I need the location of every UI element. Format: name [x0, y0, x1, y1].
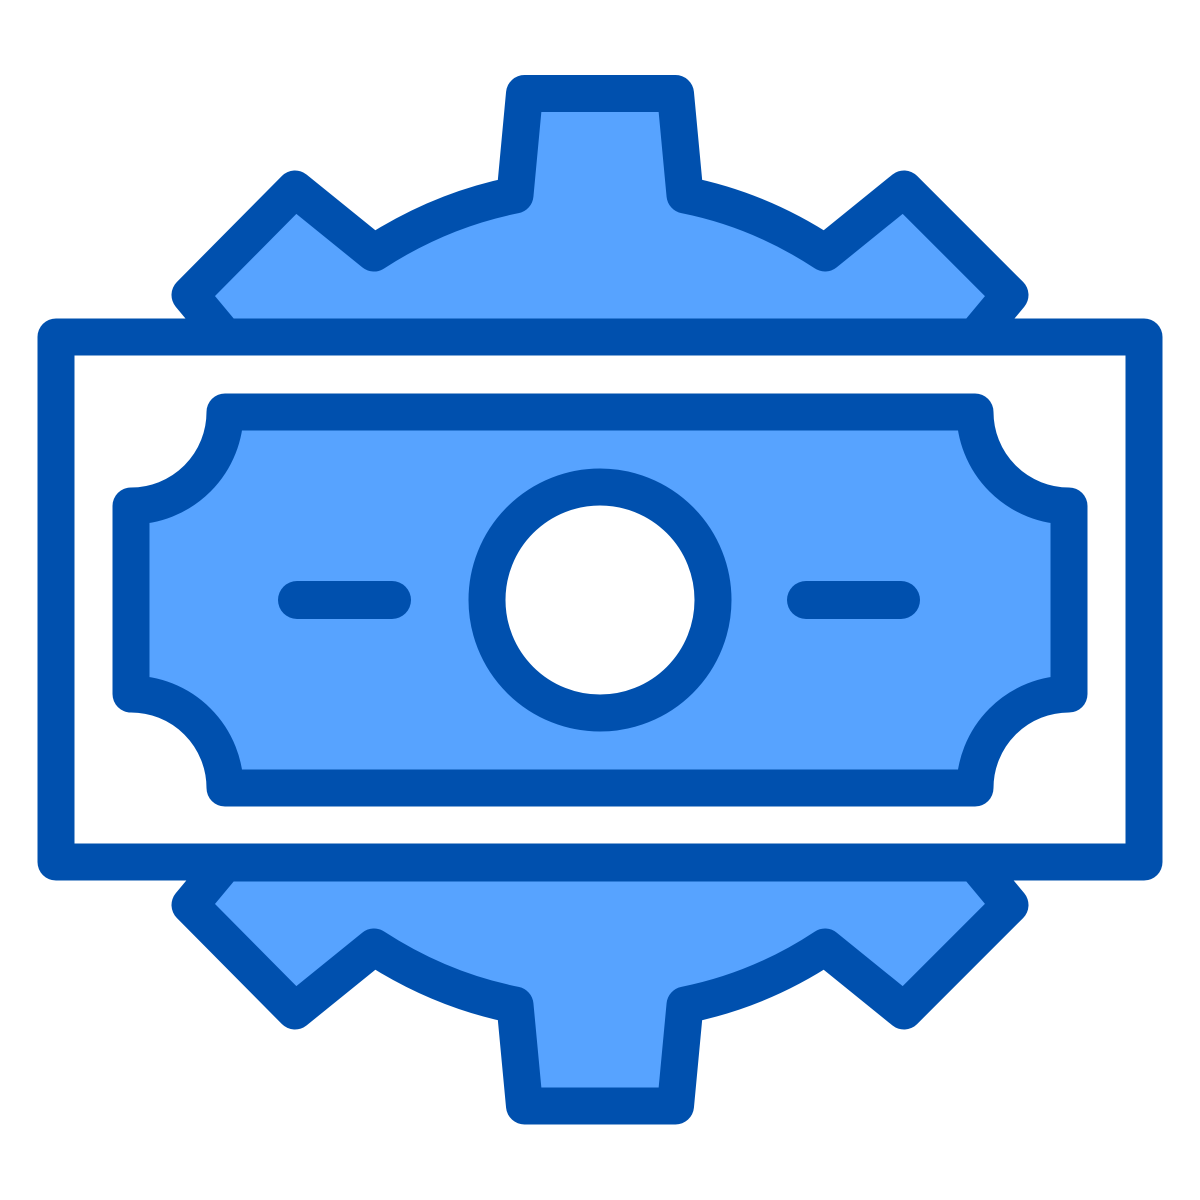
left dash [297, 581, 392, 619]
banknote outer frame [56, 337, 1144, 862]
banknote inner panel [131, 412, 1069, 788]
gear bottom half [190, 863, 1010, 1106]
right dash [806, 581, 901, 619]
gear top half [190, 94, 1010, 337]
center coin [487, 487, 713, 713]
